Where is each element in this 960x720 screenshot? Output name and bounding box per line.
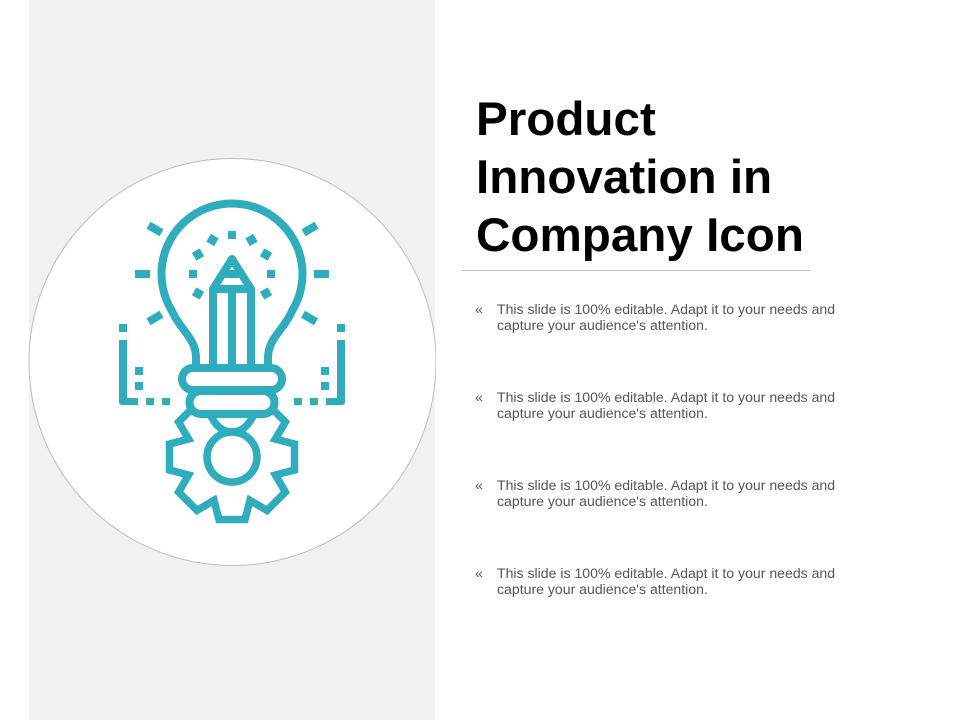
gear <box>170 404 294 520</box>
text block: bullet 2: capture your audience's attention. <box>497 405 708 421</box>
text block: bullet 1 <box>475 301 835 333</box>
title: Product <box>476 93 656 146</box>
text block: bullet 4: This slide is 100% editable. Adapt it to your needs and <box>497 565 835 581</box>
left bracket <box>119 324 170 405</box>
title: Company Icon <box>476 209 804 262</box>
panel: left gray background <box>29 0 435 720</box>
text block: bullet 3 <box>475 477 835 509</box>
title <box>476 93 804 262</box>
inner dotted arc <box>189 231 275 300</box>
light rays <box>135 225 329 322</box>
text block: bullet 2 <box>475 389 835 421</box>
text block: bullet 3: This slide is 100% editable. Adapt it to your needs and <box>497 477 835 493</box>
bulb base collars <box>182 368 282 414</box>
text block: bullet 4 <box>475 565 835 597</box>
title divider <box>462 270 810 271</box>
text block: bullet 1: « <box>475 301 483 317</box>
right bracket <box>294 324 345 405</box>
text block: bullet 2: This slide is 100% editable. Adapt it to your needs and <box>497 389 835 405</box>
text block: bullet 3: capture your audience's attention. <box>497 493 708 509</box>
icon: lightbulb with pencil and gear in circle <box>28 158 436 566</box>
text block: bullet 4: « <box>475 565 483 581</box>
text block: bullet 1: This slide is 100% editable. Adapt it to your needs and <box>497 301 835 317</box>
text block: bullet 2: « <box>475 389 483 405</box>
lightbulb outline <box>162 203 302 368</box>
text block: bullet 3: « <box>475 477 483 493</box>
pencil <box>213 259 251 368</box>
text block: bullet 4: capture your audience's attention. <box>497 581 708 597</box>
text block: bullet 1: capture your audience's attention. <box>497 317 708 333</box>
title: Innovation in <box>476 151 772 204</box>
white circle <box>29 158 436 566</box>
